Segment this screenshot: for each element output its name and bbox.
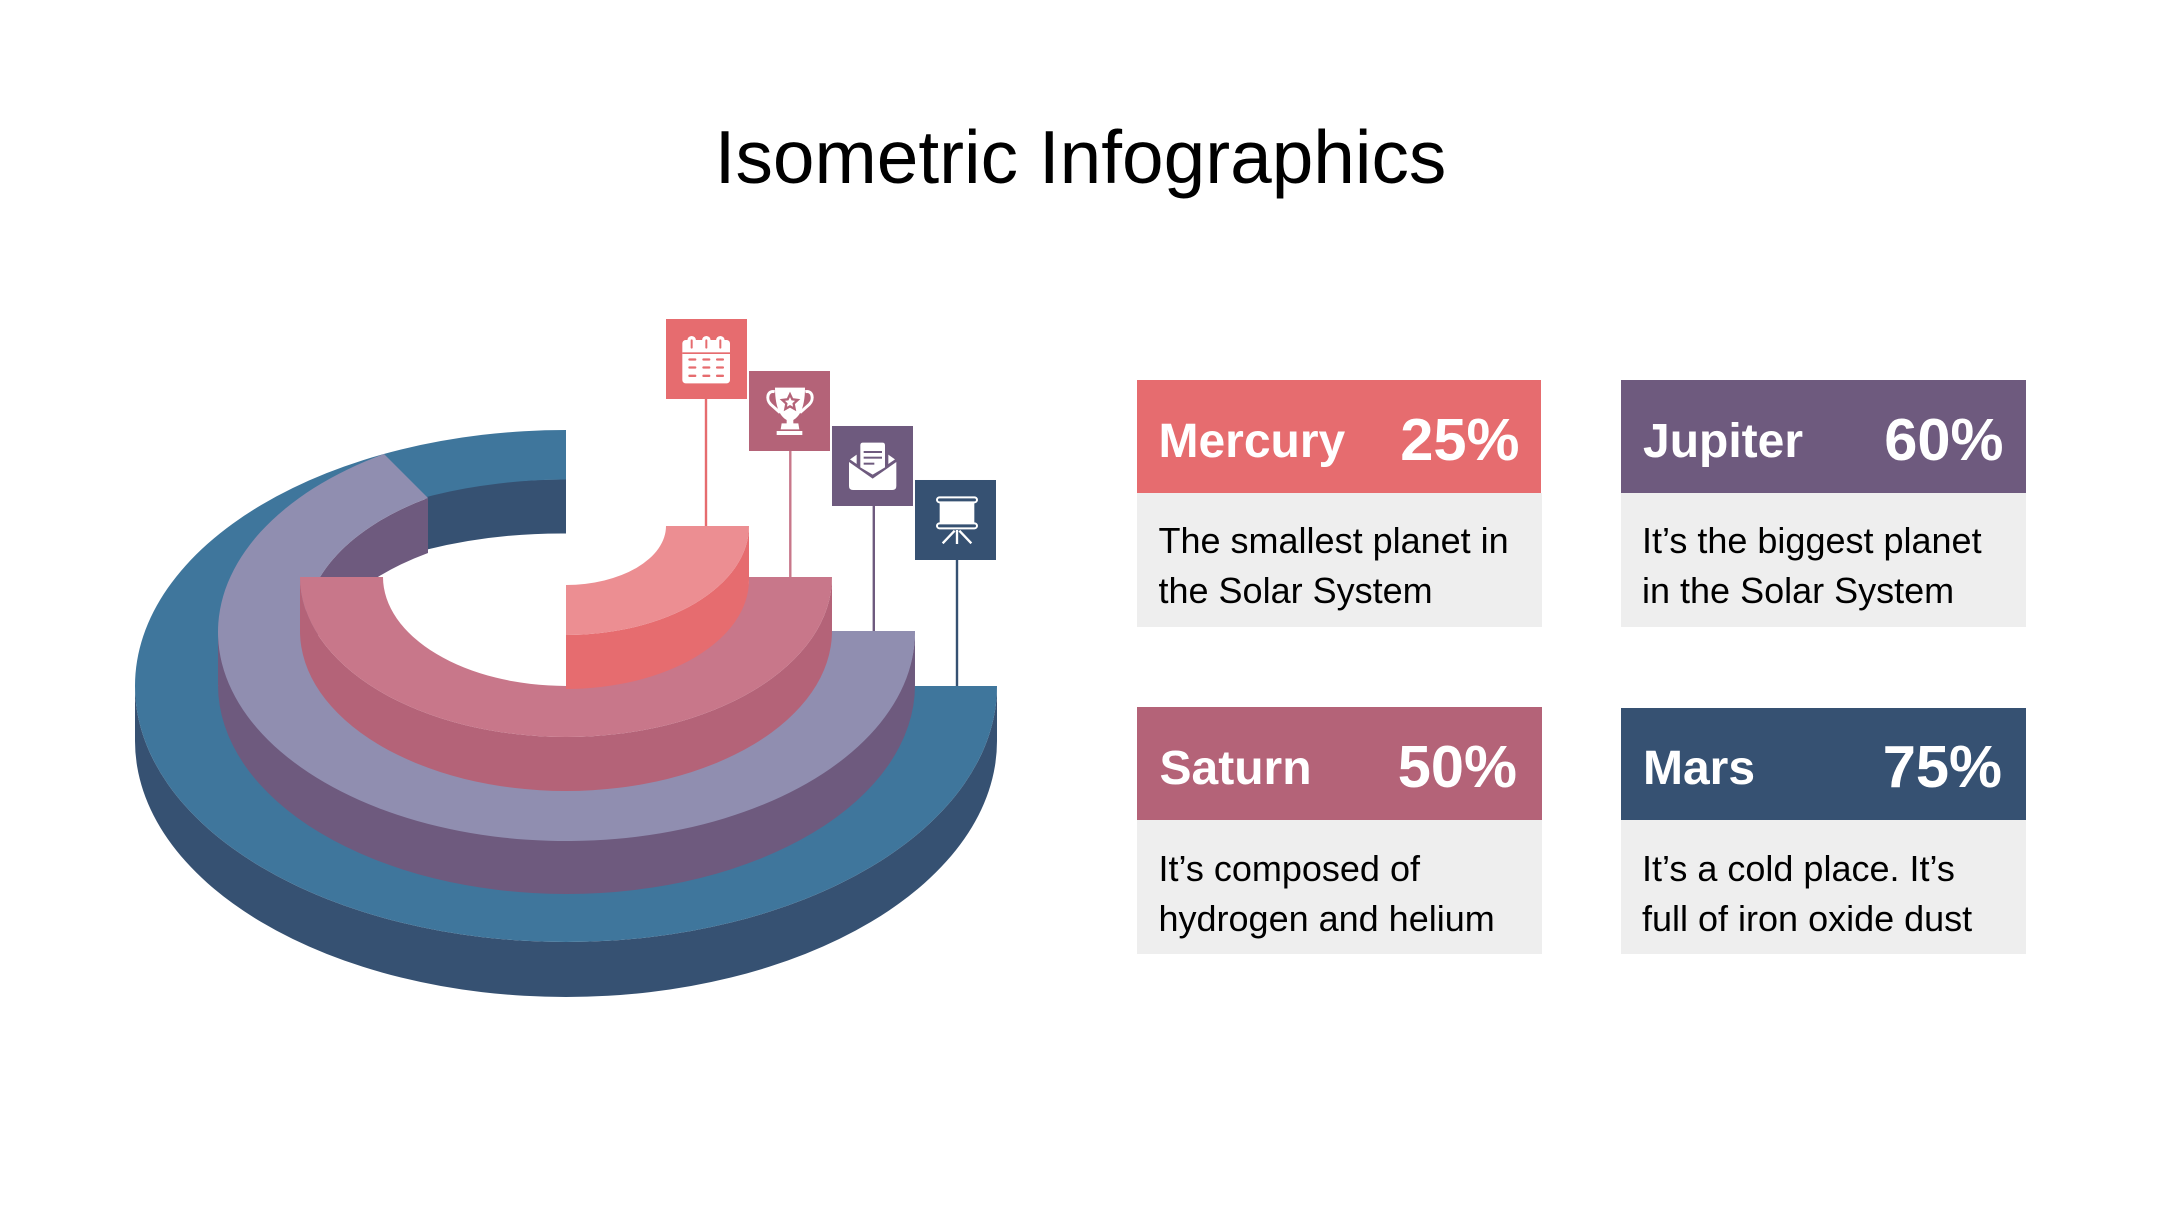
pin line: pink — [789, 451, 792, 577]
card: Mars: It’s a cold place. It’s — [1642, 848, 1955, 889]
card: Saturn: hydrogen and helium — [1158, 898, 1495, 939]
card: Mercury — [1137, 380, 1542, 627]
icon: calendar — [666, 319, 747, 399]
ring: coral — [566, 526, 749, 689]
card: Jupiter: It’s the biggest planet — [1642, 520, 1982, 561]
card: Saturn — [1137, 707, 1542, 954]
pin line: navy — [956, 560, 958, 686]
card: Mars — [1621, 708, 2026, 954]
isometric ring chart — [135, 430, 997, 997]
card: Jupiter: Jupiter — [1643, 415, 1803, 468]
icon: presentation board — [915, 480, 996, 560]
card: Mars: full of iron oxide dust — [1642, 898, 1972, 939]
icon: envelope with letter — [832, 426, 913, 506]
title: Isometric Infographics — [715, 115, 1446, 199]
pin line: coral — [705, 399, 707, 526]
icon: trophy — [749, 371, 830, 451]
card: Jupiter: 60% — [1884, 406, 2004, 473]
ring: blue outer — [135, 430, 997, 997]
ring: pink — [300, 577, 832, 791]
card: Saturn: Saturn — [1160, 742, 1312, 795]
card: Jupiter: in the Solar System — [1642, 570, 1954, 611]
pin line: purple — [873, 506, 875, 631]
card: Mars: 75% — [1883, 733, 2002, 800]
card: Mercury: Mercury — [1158, 415, 1346, 468]
card: Mars: Mars — [1643, 742, 1755, 795]
card: Saturn: 50% — [1398, 733, 1517, 800]
card: Mercury: The smallest planet in — [1158, 520, 1509, 561]
card: Mercury: 25% — [1400, 406, 1520, 473]
card: Mercury: the Solar System — [1158, 570, 1433, 611]
card: Saturn: It’s composed of — [1158, 848, 1421, 889]
ring: purple — [218, 454, 915, 894]
card: Jupiter — [1621, 380, 2026, 627]
